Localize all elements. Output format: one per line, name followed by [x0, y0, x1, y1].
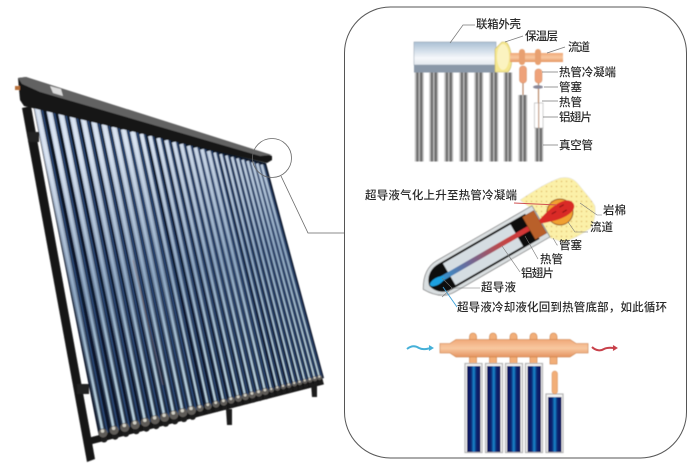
- label: 铝翅片: 铝翅片: [521, 266, 554, 280]
- vacuum tube array: [33, 104, 324, 437]
- leader lines: [514, 203, 557, 205]
- label: 管塞: 管塞: [559, 80, 582, 94]
- label: 流道: 流道: [568, 40, 590, 54]
- callout circle: [252, 138, 292, 178]
- collector header: [15, 77, 272, 163]
- lower bracket: [77, 384, 89, 394]
- drawing: manifold and tubes: [440, 333, 588, 452]
- label: 热管: 热管: [559, 95, 582, 109]
- label: 流道: 流道: [590, 220, 614, 234]
- callout connector: [281, 176, 344, 233]
- label: 铝翅片: 铝翅片: [559, 110, 592, 124]
- arrow: cold inflow: [407, 346, 433, 350]
- leader lines: [450, 25, 565, 145]
- diagram: flow through manifold: [407, 333, 617, 452]
- rail feet: [226, 384, 317, 425]
- label: 热管冷凝端: 热管冷凝端: [559, 65, 616, 79]
- label: 保温层: 保温层: [525, 29, 558, 43]
- solar collector photo: [15, 77, 324, 462]
- drawing: manifold section: [414, 42, 563, 162]
- label: 联箱外壳: 联箱外壳: [476, 17, 522, 31]
- diagram: heat pipe cross-section: [365, 177, 667, 314]
- left support rail: [22, 106, 95, 462]
- label: 超导液: 超导液: [481, 280, 516, 294]
- label: 超导液气化上升至热管冷凝端: 超导液气化上升至热管冷凝端: [365, 188, 518, 202]
- label: 管塞: 管塞: [559, 238, 582, 252]
- arrow: hot outflow: [592, 346, 617, 350]
- detail panel: [344, 7, 686, 458]
- label: 真空管: 真空管: [559, 138, 593, 152]
- bottom tube rail: [90, 377, 323, 441]
- label: 超导液冷却液化回到热管底部，如此循环: 超导液冷却液化回到热管底部，如此循环: [457, 300, 667, 314]
- label: 热管: 热管: [540, 252, 563, 266]
- diagram: manifold and vacuum tubes: [414, 17, 616, 162]
- drawing: insulation and tube: [414, 177, 595, 305]
- upper bracket: [28, 132, 39, 142]
- label: 岩棉: 岩棉: [603, 203, 626, 217]
